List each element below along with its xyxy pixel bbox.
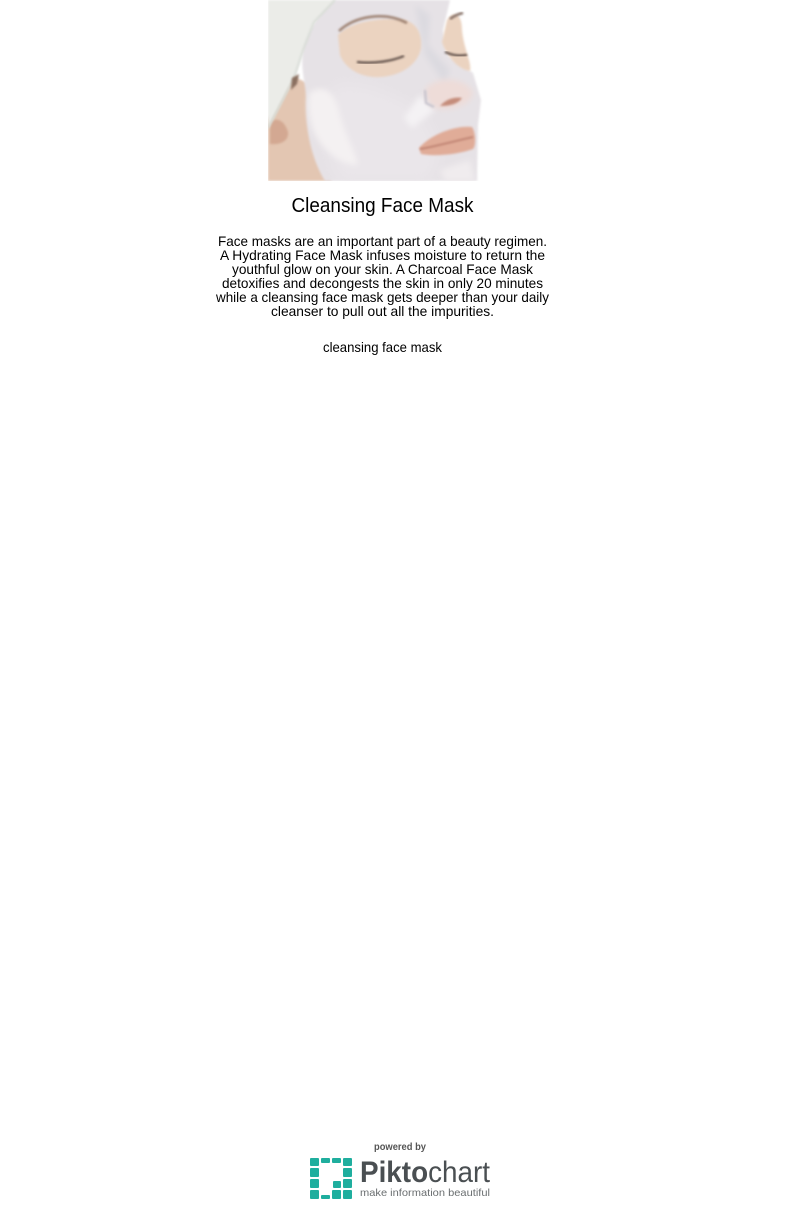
description paragraph: detoxifies and decongests the skin in only 20 minutes [222, 275, 543, 291]
title: Cleansing Face Mask [292, 195, 474, 217]
lips [419, 127, 475, 155]
powered by label: powered by [374, 1142, 426, 1153]
Piktochart footer logo [310, 1142, 491, 1199]
eye area and eyebrow, left [338, 19, 421, 77]
hair under the towel [291, 74, 299, 90]
image caption: cleansing face mask [323, 339, 443, 355]
description paragraph: Face masks are an important part of a beauty regimen. [218, 233, 547, 249]
mask covering the face [302, 0, 481, 181]
tagline: make information beautiful [360, 1187, 490, 1199]
neck and ear skin [268, 75, 332, 181]
description paragraph: A Hydrating Face Mask infuses moisture to return the [220, 247, 545, 263]
eye area and eyebrow, right [442, 15, 470, 71]
description paragraph [215, 233, 549, 319]
description paragraph: while a cleansing face mask gets deeper than your daily [215, 289, 549, 305]
description paragraph: cleanser to pull out all the impurities. [271, 303, 494, 319]
description paragraph: youthful glow on your skin. A Charcoal Face Mask [232, 261, 534, 277]
towel wrapped around the head [268, 0, 335, 128]
Piktochart wordmark: Piktochart [360, 1156, 491, 1189]
infographic canvas [216, 0, 549, 1199]
photo: woman wearing a face mask [268, 0, 482, 181]
nose [427, 80, 472, 108]
icon: Piktochart tile mark [310, 1158, 352, 1199]
